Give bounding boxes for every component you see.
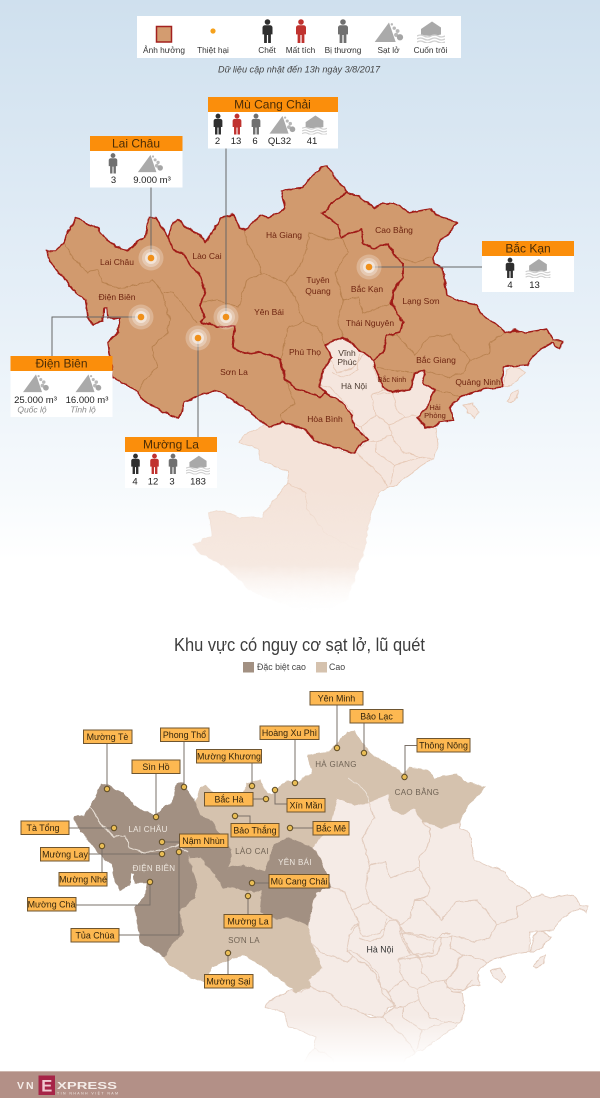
risk map place labels: Sìn Hồ — [142, 762, 170, 772]
province labels, top map: Bắc Kạn — [351, 284, 383, 294]
legend panel: Bị thương — [325, 45, 362, 55]
risk map place labels: Xín Mần — [289, 800, 323, 810]
province labels, top map: Hòa Bình — [307, 414, 343, 424]
risk legend: Đặc biệt cao — [257, 662, 306, 672]
callout: Điện Biên — [10, 356, 112, 417]
legend panel: Ảnh hưởng — [143, 44, 185, 55]
risk map province labels: LAI CHÂU — [128, 825, 168, 834]
legend panel: Thiệt hại — [197, 45, 229, 55]
risk map place labels: Mường Sại — [206, 976, 251, 986]
callout: Mường La: Mường La — [143, 438, 199, 452]
risk map place labels: Mường Tè — [87, 732, 128, 742]
risk map place labels: Nậm Nhùn — [182, 836, 225, 846]
legend panel: Mất tích — [286, 45, 316, 55]
risk map place labels: Mường La — [227, 916, 269, 926]
callout: Mù Cang Chải: QL32 — [268, 136, 291, 147]
callout: Lai Châu: 9.000 m³ — [133, 175, 171, 186]
legend panel — [137, 16, 461, 58]
province labels, top map: Hà Giang — [266, 230, 302, 240]
risk map location dots — [99, 745, 407, 956]
background sky gradient — [0, 0, 600, 560]
risk map place labels — [21, 692, 470, 988]
legend panel: Sạt lở — [377, 45, 400, 55]
province labels, top map: Lai Châu — [100, 257, 134, 267]
callout: Mường La: 4 — [132, 476, 138, 488]
footer bar with logo: XPRESS — [57, 1080, 117, 1092]
province labels, top map: Phúc — [337, 357, 357, 367]
province labels, top map: Vĩnh — [338, 348, 356, 358]
callout: Mù Cang Chải: 41 — [307, 136, 317, 147]
province labels, top map: Sơn La — [220, 367, 248, 377]
footer bar with logo: TIN NHANH VIỆT NAM — [57, 1090, 118, 1096]
callout: Mường La: 3 — [169, 476, 175, 488]
risk legend: Cao — [329, 662, 345, 672]
map: landslide and flash flood risk — [0, 731, 600, 1072]
footer bar with logo: E — [41, 1078, 52, 1096]
province labels, top map: Phòng — [424, 411, 446, 420]
callout: Mù Cang Chải — [208, 97, 338, 148]
province labels, top map: Phú Thọ — [289, 347, 321, 357]
risk map province labels: YÊN BÁI — [278, 858, 312, 867]
risk map place labels: Mường Khương — [197, 752, 261, 762]
province labels, top map: Cao Bằng — [375, 225, 413, 235]
footer bar with logo: VN — [17, 1080, 36, 1092]
risk map place labels: Bảo Lạc — [360, 712, 393, 722]
callout: Điện Biên: Điện Biên — [35, 356, 88, 370]
callout: Điện Biên: 25.000 m³ — [14, 395, 57, 406]
callout: Mường La — [125, 437, 217, 488]
risk map place labels: Yên Minh — [318, 694, 355, 704]
leader lines, top map — [52, 148, 482, 437]
province labels, top map: Thái Nguyên — [346, 318, 394, 328]
risk map place labels: Hoàng Xu Phì — [262, 728, 317, 738]
callout: Bắc Kạn — [482, 240, 574, 292]
callout: Lai Châu: 3 — [111, 175, 116, 186]
risk map province labels: CAO BẰNG — [395, 788, 439, 797]
risk map place labels: Bảo Thắng — [233, 826, 277, 836]
risk map province labels — [128, 760, 439, 954]
callout: Mù Cang Chải: Mù Cang Chải — [234, 98, 311, 112]
risk map place labels: Bắc Mê — [316, 824, 346, 834]
map: affected provinces — [47, 166, 562, 615]
risk map place labels: Mù Cang Chải — [271, 876, 327, 886]
risk map province labels: ĐIỆN BIÊN — [133, 864, 175, 873]
callout: Mù Cang Chải: 6 — [252, 136, 258, 147]
risk map place labels: Thông Nông — [419, 740, 468, 750]
risk map place labels: Tủa Chùa — [76, 930, 115, 940]
risk legend — [243, 662, 345, 672]
callout: Bắc Kạn: 4 — [507, 280, 513, 291]
risk map leader lines — [69, 705, 417, 974]
province labels, top map: Quảng Ninh — [455, 377, 501, 387]
risk map place labels: Phong Thổ — [163, 730, 206, 740]
province labels, top map: Yên Bái — [254, 307, 284, 317]
callout: Mù Cang Chải: 2 — [215, 136, 220, 147]
province labels, top map: Tuyên — [306, 275, 330, 285]
callout: Lai Châu — [90, 136, 182, 188]
risk map place labels: Mường Chà — [28, 900, 75, 910]
risk map place labels: Mường Nhé — [59, 874, 107, 884]
province labels, top map: Hải — [429, 403, 441, 412]
risk map place labels: Tà Tổng — [27, 823, 60, 833]
damage markers — [128, 246, 382, 350]
risk map province labels: Hà Nội — [367, 944, 393, 954]
legend panel: Chết — [258, 45, 276, 55]
callout: Điện Biên: 16.000 m³ — [66, 395, 108, 406]
risk map title: Khu vực có nguy cơ sạt lở, lũ quét — [174, 634, 425, 655]
province labels, top map: Hà Nội — [341, 381, 367, 391]
callout: Mường La: 12 — [148, 476, 158, 488]
province labels, top map: Lào Cai — [192, 251, 222, 261]
province labels, top map: Lạng Sơn — [402, 296, 440, 306]
risk map province labels: HÀ GIANG — [315, 760, 357, 769]
legend panel: Cuốn trôi — [414, 45, 447, 55]
risk map province labels: SƠN LA — [228, 936, 260, 945]
province labels, top map: Bắc Ninh — [378, 375, 406, 384]
callout: Điện Biên: Quốc lộ — [17, 404, 47, 414]
province labels, top map — [99, 225, 501, 424]
callout: Mù Cang Chải: 13 — [231, 136, 241, 147]
callout: Bắc Kạn: Bắc Kạn — [505, 240, 551, 256]
data update note: Dữ liệu cập nhật đến 13h ngày 3/8/2017 — [218, 64, 381, 74]
callout: Điện Biên: Tỉnh lộ — [70, 404, 96, 414]
province labels, top map: Điện Biên — [99, 292, 136, 302]
province labels, top map: Quang — [305, 286, 331, 296]
callout: Bắc Kạn: 13 — [529, 280, 540, 291]
callout: Lai Châu: Lai Châu — [112, 136, 160, 150]
risk map place labels: Mường Lay — [42, 850, 88, 860]
risk map place labels: Bắc Hà — [214, 794, 244, 804]
callout: Mường La: 183 — [190, 476, 206, 488]
province labels, top map: Bắc Giang — [416, 355, 456, 365]
footer bar with logo — [0, 1071, 600, 1098]
risk map province labels: LÀO CAI — [235, 847, 269, 856]
